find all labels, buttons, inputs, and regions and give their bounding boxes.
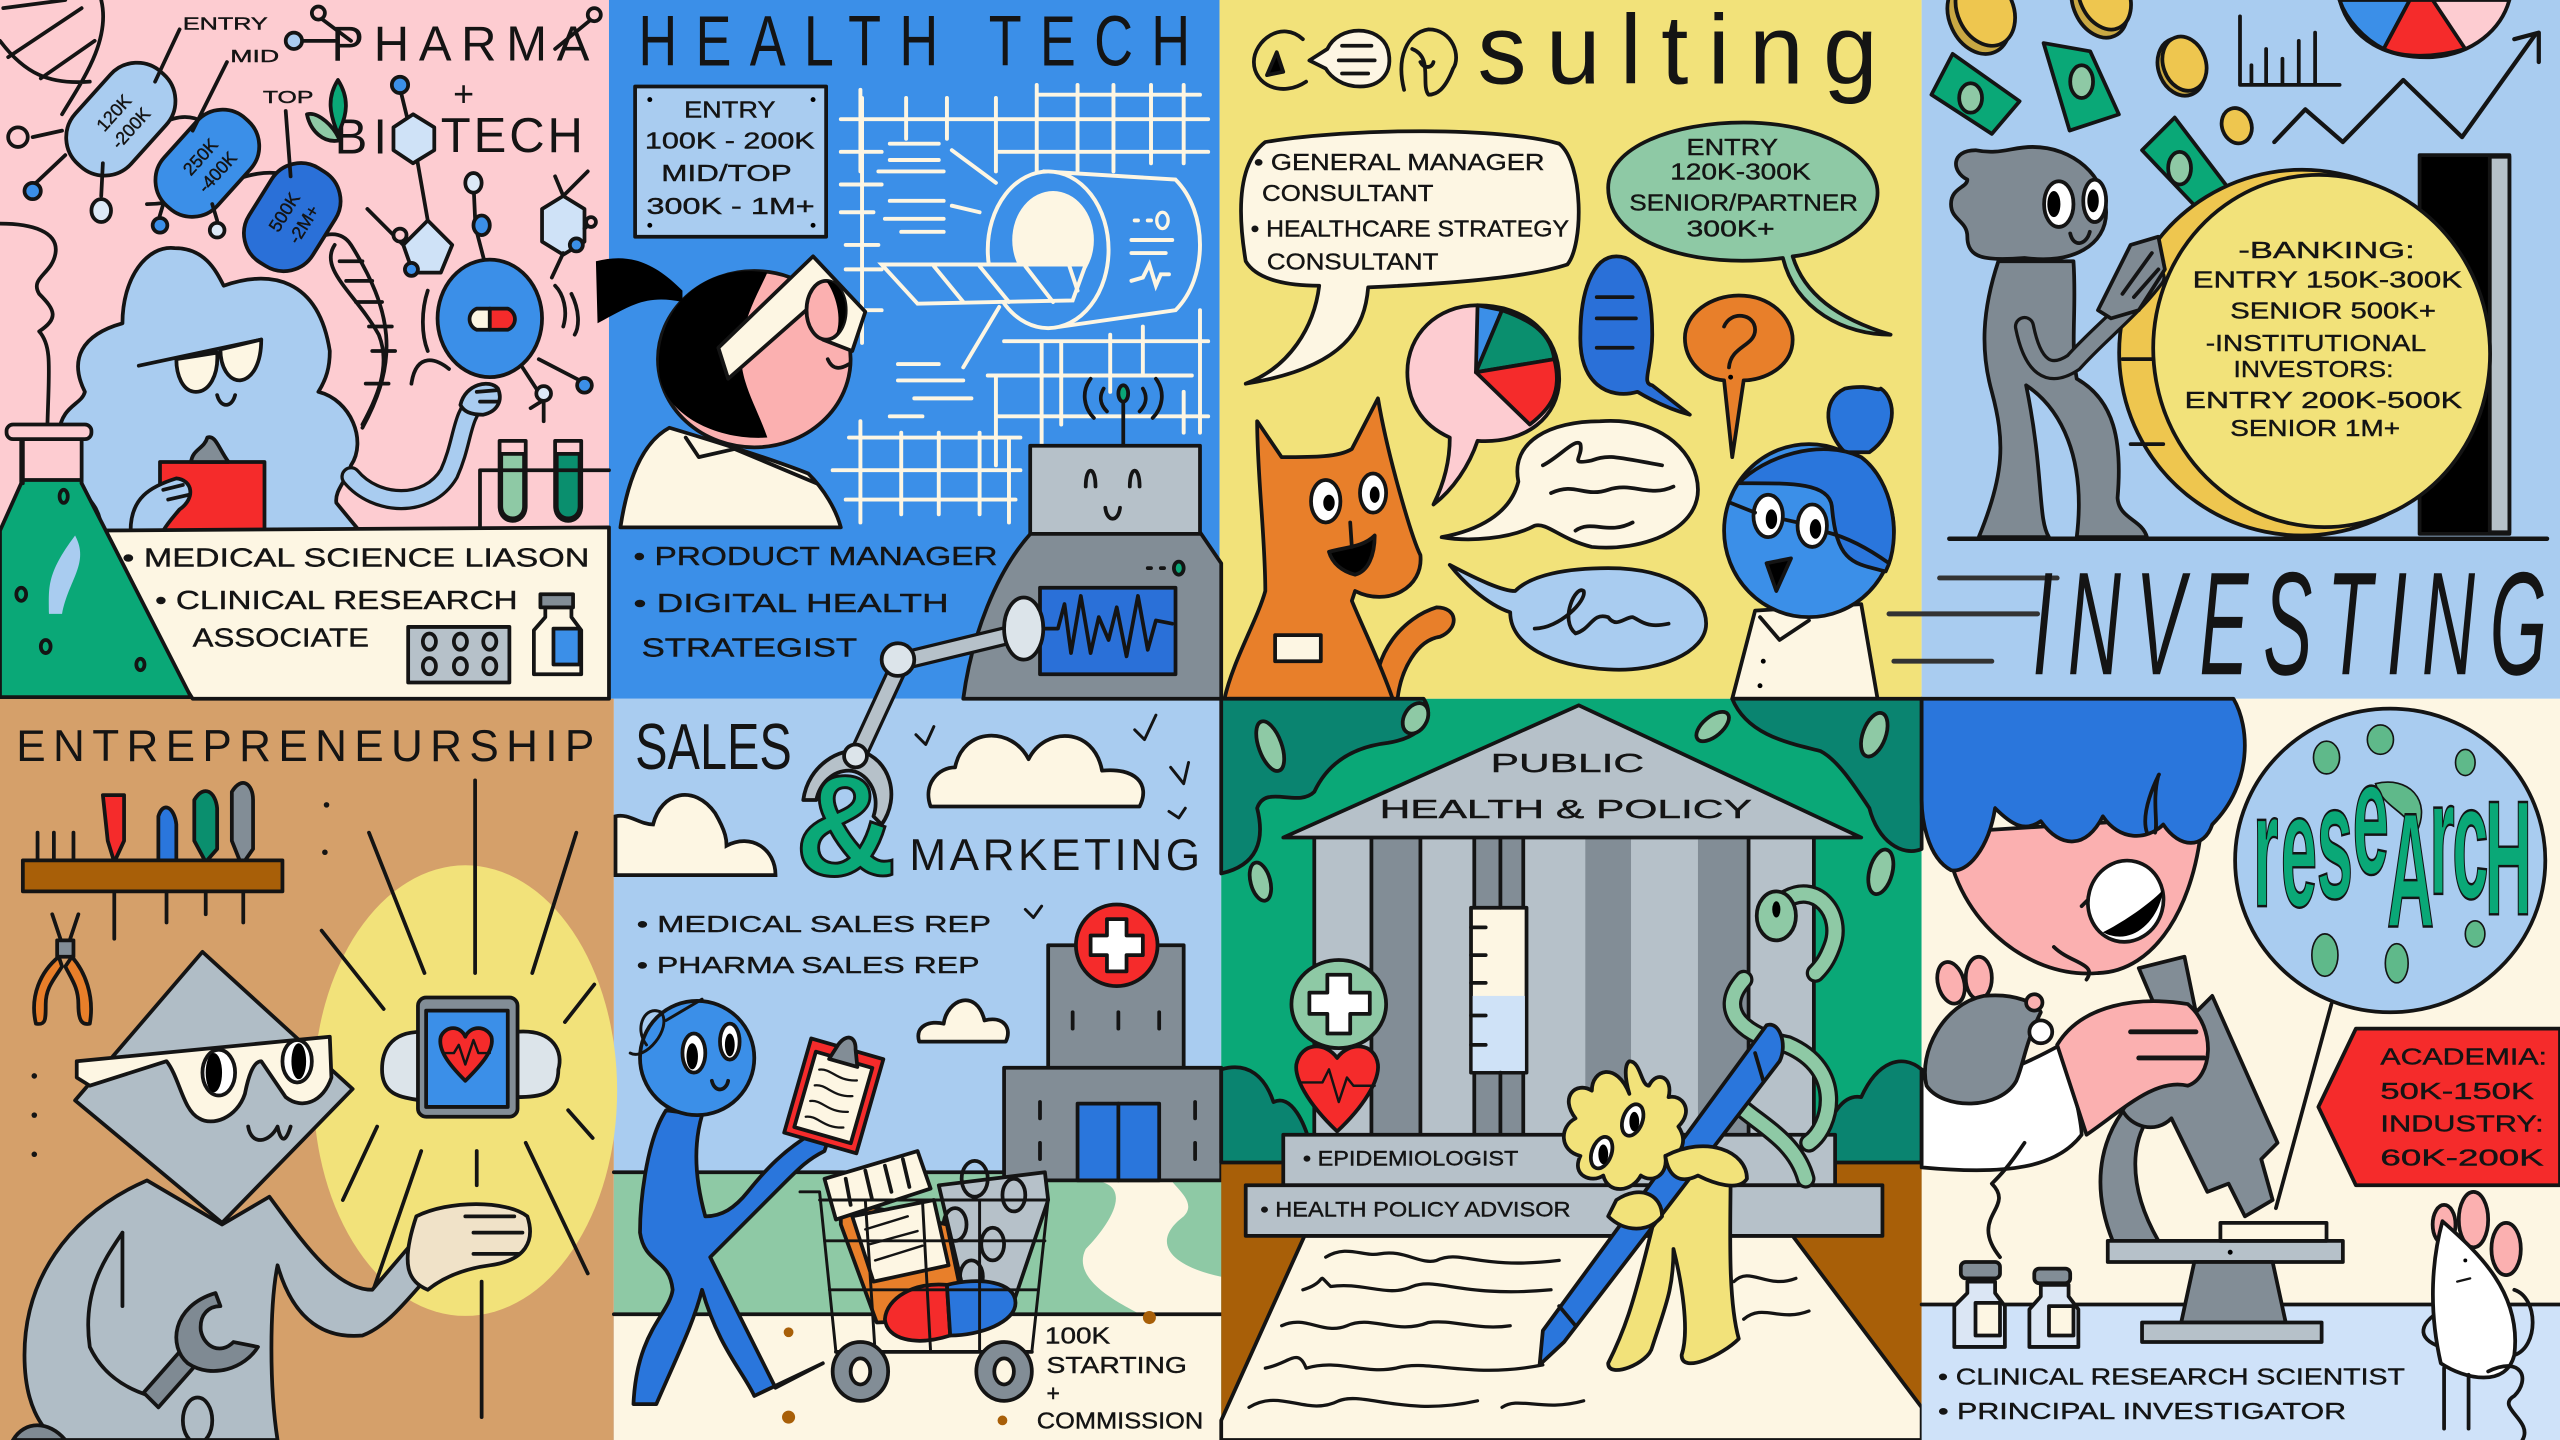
role list: • MEDICAL SCIENCE LIASON: [122, 543, 589, 573]
path dots: [782, 1311, 1156, 1425]
role list: STRATEGIST: [642, 632, 857, 662]
big coin with salary text: SENIOR 500K+: [2230, 297, 2436, 323]
speech bubble: roles: [1241, 131, 1579, 384]
salary labels: MID: [230, 46, 279, 66]
speech bubble: roles: • GENERAL MANAGER: [1254, 149, 1544, 175]
speech bubble: handwriting: [1442, 421, 1698, 548]
title: health tech: HEALTH TECH: [638, 2, 1190, 81]
clipboard: [784, 1027, 887, 1153]
cloud: small: [918, 1000, 1008, 1042]
title: pharma + biotech: PHARMA: [331, 17, 590, 71]
shopping cart contents: [824, 1151, 1048, 1341]
role list: [633, 541, 998, 662]
character: blue shopper: [630, 999, 833, 1404]
roof with title: PUBLIC: [1491, 748, 1644, 778]
starting salary note: COMMISSION: [1037, 1408, 1203, 1434]
title: pharma + biotech: [307, 17, 590, 164]
test tubes and rack: [480, 441, 609, 531]
blueprint grid: [833, 85, 1208, 522]
rising line arrow: [2274, 33, 2539, 142]
floor panel: [85, 527, 609, 699]
salary pill: entry: 120K: [92, 91, 135, 135]
speech bubble: roles: CONSULTANT: [1267, 248, 1438, 274]
salary labels: [155, 13, 314, 176]
DNA helix: [0, 0, 395, 428]
sign: salary ranges: MID/TOP: [661, 160, 792, 186]
sign: salary ranges: 300K - 1M+: [647, 193, 815, 219]
character: blue woman: [1724, 387, 1894, 699]
hand holding microscope: [2057, 1001, 2208, 1135]
big coin with salary text: ENTRY 200K-500K: [2184, 387, 2462, 413]
starting salary note: +: [1047, 1380, 1060, 1406]
big coin with salary text: -INSTITUTIONAL: [2206, 330, 2426, 356]
molecule structures: [367, 171, 596, 278]
panel: sales and marketing: [614, 710, 1221, 1440]
roof with title: HEALTH & POLICY: [1380, 794, 1752, 824]
building columns: [1314, 836, 1814, 1138]
character: grey figure pushing coin: [1949, 147, 2547, 539]
red salary sign: INDUSTRY:: [2380, 1110, 2544, 1136]
title: entrepreneurship: ENTREPRENEURSHIP: [16, 722, 594, 771]
role list: [637, 911, 991, 978]
character: orange cat: [1224, 398, 1454, 699]
salary pill: entry: -200K: [107, 104, 154, 153]
speech bubble: roles: • HEALTHCARE STRATEGY: [1251, 216, 1569, 242]
steps with roles: • EPIDEMIOLOGIST: [1303, 1148, 1518, 1171]
research petri dish: [2235, 709, 2545, 1208]
title: consulting: [1254, 0, 1878, 104]
role list: [122, 543, 589, 653]
dots: [32, 802, 329, 1157]
salary pill: top: [231, 150, 354, 284]
salary pill: mid: [141, 96, 273, 231]
steps with roles: [1246, 1135, 1882, 1236]
speech bubble: question mark: [1685, 296, 1793, 457]
salary pill: top: 500K: [265, 189, 304, 235]
title: investing: INVESTING: [2033, 541, 2547, 706]
ground and lawn: [614, 1172, 1221, 1440]
sign: salary ranges: ENTRY: [684, 97, 776, 123]
starting salary note: [1037, 1323, 1203, 1434]
character: woman with goggles: [596, 256, 865, 527]
shopping cart frame: [800, 1192, 1048, 1401]
role list: [1938, 1363, 2405, 1424]
title: pharma + biotech: TECH: [441, 109, 583, 163]
speech bubble: salary ranges: [1608, 122, 1891, 335]
ampersand: &: [795, 746, 896, 906]
red salary sign: 60K-200K: [2380, 1145, 2544, 1171]
pliers: [34, 914, 91, 1024]
title: marketing: MARKETING: [909, 831, 1200, 880]
panel: pharma and biotech: [0, 0, 609, 699]
roof with title: [1283, 705, 1861, 838]
panel: consulting: [1224, 0, 1894, 699]
salary pill: mid: 250K: [179, 135, 222, 179]
molecule lines and nodes: [8, 7, 601, 238]
big coin with salary text: -BANKING:: [2238, 237, 2415, 263]
big coin with salary text: SENIOR 1M+: [2230, 415, 2400, 441]
steps with roles: • HEALTH POLICY ADVISOR: [1260, 1198, 1571, 1221]
hospital: [1004, 904, 1221, 1180]
flask: [0, 424, 191, 697]
heart: [1296, 1046, 1378, 1131]
snake: [1732, 891, 1835, 1179]
red salary sign: 50K-150K: [2380, 1078, 2534, 1104]
bottles: [1954, 1262, 2078, 1347]
light rays: [322, 780, 594, 1417]
character: researcher face and hair: [1922, 699, 2245, 980]
yellow glow: [313, 865, 617, 1316]
microscope: [2100, 957, 2343, 1342]
role list: • MEDICAL SALES REP: [637, 911, 991, 937]
character: diamond head with goggles: [13, 952, 530, 1440]
role list: • PRODUCT MANAGER: [633, 541, 998, 571]
syringe: [1471, 838, 1527, 1135]
speech bubble: blue handwriting: [1450, 565, 1706, 670]
title: sales: SALES: [635, 710, 792, 783]
role list: • CLINICAL RESEARCH SCIENTIST: [1938, 1363, 2405, 1389]
speech bubble: salary ranges: SENIOR/PARTNER: [1629, 190, 1858, 216]
yellow germ character with pen: [1540, 1025, 1783, 1370]
handwriting: [1249, 1251, 1809, 1407]
white mouse: [2423, 1192, 2533, 1440]
role list: ASSOCIATE: [193, 623, 369, 653]
speech bubble: salary ranges: 120K-300K: [1670, 159, 1811, 185]
role list: • CLINICAL RESEARCH: [155, 585, 518, 615]
panel: investing: [1889, 0, 2547, 706]
speech bubble: list: [1580, 256, 1690, 415]
molecule ball with capsule: [411, 260, 592, 421]
robot: [963, 379, 1221, 699]
speech bubble: salary ranges: 300K+: [1687, 216, 1775, 242]
salary labels: ENTRY: [183, 13, 268, 33]
title: pharma + biotech: BI: [335, 110, 387, 164]
falling bills: [1931, 43, 2237, 216]
salary pill: entry: [51, 48, 190, 190]
salary labels: TOP: [263, 87, 314, 107]
panel: research: [1922, 699, 2560, 1440]
sign: salary ranges: 100K - 200K: [645, 128, 815, 154]
wearable device with heart: [382, 998, 560, 1117]
cross badge: [1291, 960, 1386, 1048]
sign: salary ranges: [635, 87, 826, 237]
pill pack: [408, 627, 509, 682]
mini bar chart: [2240, 16, 2340, 85]
arm and fist: [351, 384, 500, 500]
big coin with salary text: INVESTORS:: [2233, 356, 2393, 382]
wavy tube: [0, 224, 56, 428]
panel: public health and policy: [1221, 699, 1922, 1440]
speech bubble: salary ranges: ENTRY: [1687, 134, 1778, 160]
speech bubble: roles: CONSULTANT: [1262, 180, 1434, 206]
cloud: large: [928, 736, 1143, 807]
wrench: [144, 1293, 258, 1407]
cloud: left: [616, 795, 776, 875]
robot arm reaching into sales panel: [803, 598, 1043, 824]
big coin with salary text: [2090, 141, 2518, 564]
vial: [534, 594, 581, 674]
lower light strip: [1922, 1304, 2560, 1440]
trees: [1221, 699, 1922, 1162]
door: [2420, 155, 2509, 534]
title: pharma + biotech: +: [453, 73, 474, 114]
speed lines: [1889, 578, 2057, 661]
research petri dish: reseArcH: [2253, 726, 2532, 962]
lab coat arm: [1922, 1045, 2082, 1257]
panel: health tech: [596, 2, 1221, 699]
role list: • PRINCIPAL INVESTIGATOR: [1938, 1398, 2346, 1424]
falling coins: [1936, 0, 2257, 148]
salary pill: mid: -400K: [194, 148, 241, 197]
character: blue cloud scientist: [59, 248, 359, 531]
role list: • PHARMA SALES REP: [637, 952, 980, 978]
big coin with salary text: ENTRY 150K-300K: [2193, 266, 2462, 292]
ground: [1221, 1162, 1922, 1440]
salary pill: top: -2M+: [284, 202, 323, 247]
pie fragment: [2340, 0, 2509, 57]
panel: entrepreneurship: [13, 722, 617, 1440]
speech bubble: pie chart: [1407, 305, 1559, 504]
grey mouse: [1925, 957, 2052, 1104]
starting salary note: STARTING: [1047, 1352, 1187, 1378]
red salary sign: ACADEMIA:: [2380, 1043, 2547, 1069]
birds: [916, 715, 1189, 918]
role list: • DIGITAL HEALTH: [633, 588, 949, 618]
red salary sign: [2318, 1029, 2560, 1185]
tool shelf: [23, 783, 282, 939]
starting salary note: 100K: [1045, 1323, 1110, 1349]
MRI scanner: [882, 171, 1200, 328]
